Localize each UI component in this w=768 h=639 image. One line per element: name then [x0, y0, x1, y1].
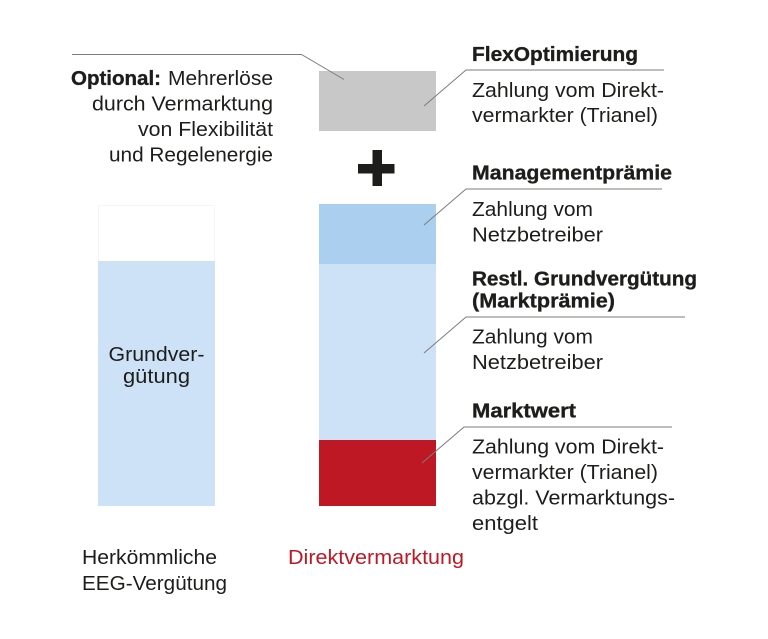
caption: Herkömmliche EEG-Vergütung: EEG-Vergütung: [82, 572, 227, 595]
leader line: [72, 54, 344, 80]
bar: Grundvergütung: [98, 261, 215, 506]
text: [472, 326, 603, 374]
heading: Managementprämie: [472, 162, 672, 184]
text: optional revenue: durch Vermarktung: [92, 92, 273, 116]
text: Netzbetreiber: [472, 351, 603, 374]
label: Grundvergütung: Grundver-: [108, 343, 204, 366]
callout: Managementprämie: [424, 162, 672, 246]
text: entgelt: [472, 512, 538, 535]
bar segment: Managementprämie: [319, 204, 436, 264]
heading: [472, 268, 697, 312]
text: optional revenue: Optional:: [71, 67, 161, 90]
text: vermarkter (Trianel): [472, 461, 658, 484]
text: Zahlung vom Direkt-: [472, 79, 664, 102]
text: vermarkter (Trianel): [472, 104, 658, 127]
callout: Restliche Grundvergütung: [424, 268, 697, 374]
caption: Direktvermarktung: Direktvermarktung: [288, 546, 464, 569]
text: Zahlung vom: [472, 198, 593, 221]
label: Grundvergütung: [108, 343, 204, 388]
left column: conventional EEG remuneration: [82, 206, 227, 595]
callout: FlexOptimierung: [424, 43, 664, 127]
text: optional revenue: [71, 67, 273, 166]
leader line: [424, 189, 662, 225]
callout: optional revenue: [71, 54, 344, 166]
text: [472, 79, 664, 127]
text: optional revenue: Mehrerlöse: [168, 67, 273, 90]
heading: FlexOptimierung: [472, 43, 638, 66]
bar segment: Restliche Grundvergütung: [319, 264, 436, 440]
bar segment: FlexOptimierung: [319, 71, 436, 131]
heading: Marktwert: [472, 400, 576, 422]
text: abzgl. Vermarktungs-: [472, 486, 675, 510]
caption: Herkömmliche EEG-Vergütung: [82, 546, 227, 595]
bar outline: empty top section: [98, 206, 214, 262]
bar segment: Marktwert: [319, 440, 436, 506]
text: optional revenue: von Flexibilität: [138, 118, 273, 141]
label: Grundvergütung: gütung: [123, 365, 190, 388]
text: Zahlung vom Direkt-: [472, 436, 664, 458]
text: Zahlung vom: [472, 326, 593, 348]
leader line: [424, 317, 685, 353]
right column: Direktvermarktung stack: [288, 71, 464, 569]
text: [472, 436, 675, 535]
leader line: [424, 70, 664, 106]
icon: plus: [358, 150, 394, 186]
heading: Restl. Grundvergütung: [472, 268, 697, 290]
text: optional revenue: und Regelenergie: [109, 144, 273, 166]
text: Netzbetreiber: [472, 224, 603, 246]
text: [472, 198, 603, 246]
callout: Marktwert: [422, 400, 675, 535]
leader line: [422, 427, 672, 463]
caption: Herkömmliche EEG-Vergütung: Herkömmliche: [82, 546, 217, 569]
heading: (Marktprämie): [472, 290, 615, 312]
